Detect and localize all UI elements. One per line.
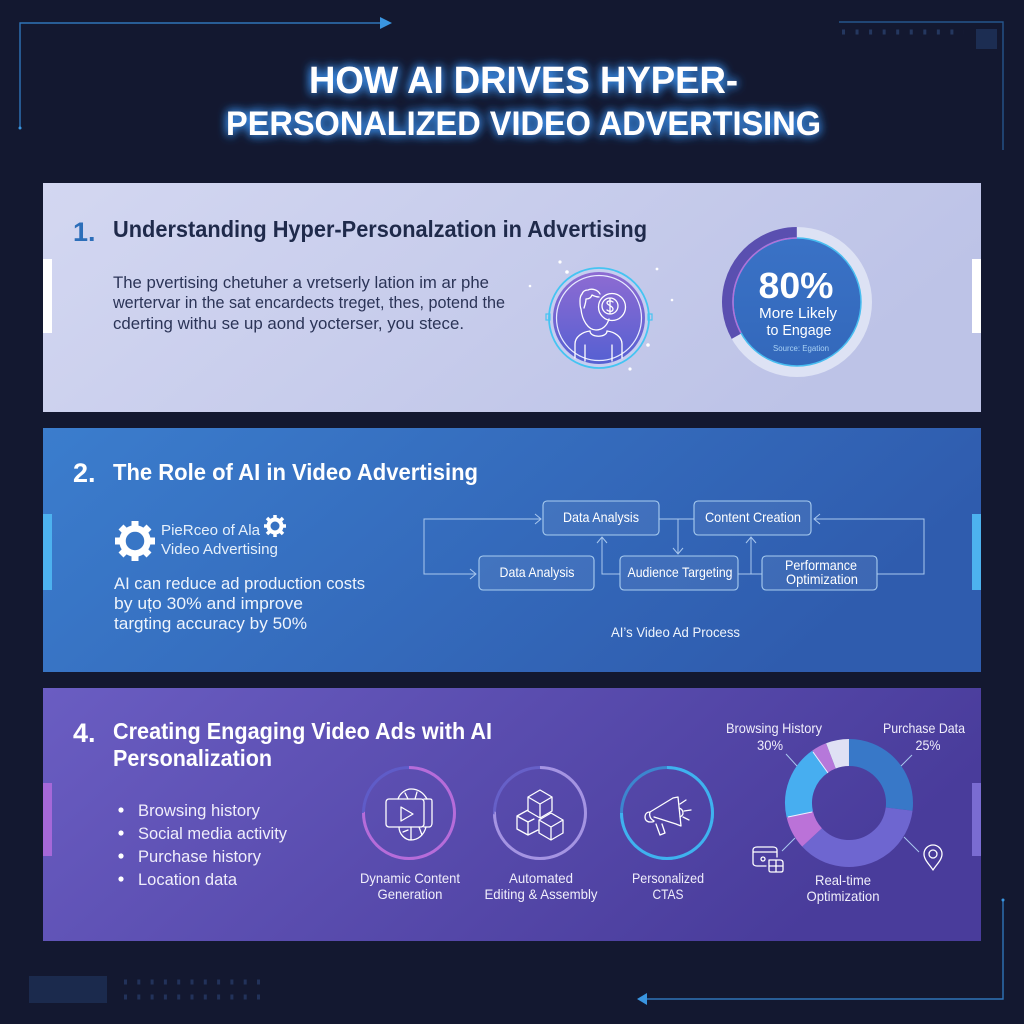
flow box: content creation (694, 501, 811, 535)
panel: role of AI (43, 428, 981, 672)
body text: wertervar in the sat encardects treget, thes, potend the (112, 294, 505, 312)
flow box: data analysis lower (479, 556, 594, 590)
bullet list: data sources (118, 802, 288, 889)
title (226, 60, 821, 143)
section number 2: 2. (73, 458, 96, 488)
gauge label (759, 305, 837, 339)
icon: personalized user profile (529, 260, 673, 371)
flow box: performance optimization: Optimization (786, 571, 858, 587)
bullet list: data sources: Social media activity (138, 825, 288, 843)
body text: cderting withu se up aond yocterser, you stece. (113, 315, 464, 333)
flow box: data analysis lower: Data Analysis (500, 564, 574, 580)
icon: location pin (924, 845, 942, 870)
donut label: purchase data (883, 720, 965, 753)
flow box: performance optimization (762, 556, 877, 590)
gauge source: Source: Egation (773, 344, 829, 353)
donut label: real-time optimization: Real-time (815, 872, 871, 888)
heading: creating engaging video ads: Creating Engaging Video Ads with AI (113, 718, 492, 744)
frame: bottom-right corner arrow (637, 898, 1004, 1005)
heading: creating engaging video ads (113, 718, 492, 771)
donut label: purchase data: Purchase Data (883, 720, 965, 736)
gauge label: to Engage (766, 322, 832, 339)
body text with statistics: by uțo 30% and improve (114, 595, 303, 613)
feature: personalized CTAs: Personalized (632, 870, 704, 886)
donut label: real-time optimization (806, 872, 880, 904)
flow box: audience targeting (620, 556, 738, 590)
panel: understanding hyper-personalization (43, 183, 981, 412)
icon: browser window (753, 847, 783, 872)
section number 1: 1. (73, 217, 96, 247)
body text: The pvertising chetuher a vretserly lation im ar phe (113, 274, 489, 292)
chart: 80% gauge (703, 208, 891, 396)
heading: creating engaging video ads: Personalization (113, 745, 272, 771)
donut label: real-time optimization: Optimization (806, 888, 880, 904)
flow box: audience targeting: Audience Targeting (628, 564, 732, 580)
flow box: performance optimization: Performance (785, 557, 857, 573)
bullet list: data sources: Browsing history (138, 802, 261, 820)
feature: automated editing and assembly: Editing & Assembly (484, 886, 598, 902)
donut label: browsing history: 30% (757, 737, 783, 753)
diagram caption: AI’s Video Ad Process (611, 624, 740, 640)
feature: dynamic content generation (360, 768, 460, 902)
gauge label: More Likely (759, 305, 837, 322)
flow diagram: video ad process (424, 501, 924, 590)
gear caption: Video Advertising (161, 541, 278, 558)
icon: large gear (115, 521, 155, 561)
donut label: browsing history (726, 720, 822, 753)
section number 4: 4. (73, 718, 96, 748)
gauge value: 80% (758, 265, 834, 306)
feature: dynamic content generation: Dynamic Content (360, 870, 460, 886)
title: HOW AI DRIVES HYPER- (309, 60, 738, 102)
bullet list: data sources: Location data (138, 871, 238, 889)
flow box: content creation: Content Creation (705, 509, 801, 525)
feature: personalized CTAs: CTAS (652, 886, 684, 902)
panel: creating engaging video ads (43, 688, 981, 941)
feature: personalized CTAs (622, 768, 712, 902)
body text (112, 274, 505, 333)
gear caption: PieRceo of Ala (161, 522, 261, 539)
frame: top-right corner with ticks (839, 22, 1003, 150)
frame: top-left corner arrow (18, 17, 392, 130)
heading: role of AI: The Role of AI in Video Advertising (113, 459, 478, 485)
feature: dynamic content generation: Generation (378, 886, 442, 902)
chart: data source donut (726, 720, 965, 904)
title: PERSONALIZED VIDEO ADVERTISING (226, 105, 821, 143)
flow box: data analysis top: Data Analysis (563, 509, 639, 525)
body text with statistics: AI can reduce ad production costs (114, 575, 365, 593)
flow box: data analysis top (543, 501, 659, 535)
feature: automated editing and assembly (484, 768, 598, 902)
body text with statistics (114, 575, 365, 633)
frame: bottom-left block and ticks (29, 976, 262, 1003)
gear caption (161, 522, 278, 558)
bullet list: data sources: Purchase history (138, 848, 262, 866)
donut label: purchase data: 25% (916, 737, 940, 753)
donut label: browsing history: Browsing History (726, 720, 822, 736)
heading: understanding hyper-personalization: Understanding Hyper-Personalzation in Advertising (113, 216, 647, 242)
feature: automated editing and assembly: Automated (509, 870, 573, 886)
body text with statistics: targting accuracy by 50% (114, 615, 307, 633)
icon: small gear (264, 515, 286, 537)
